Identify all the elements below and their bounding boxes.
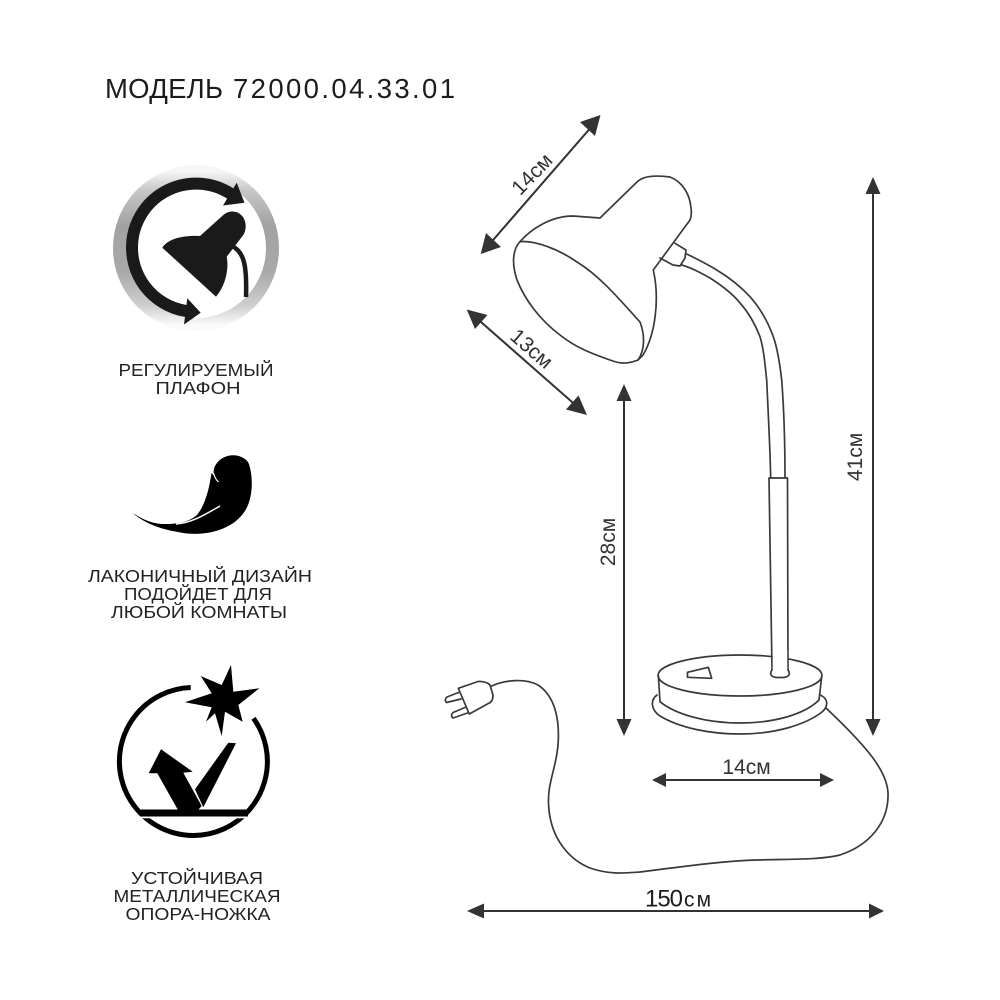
label: laconic design: ПОДОЙДЕТ ДЛЯ bbox=[124, 583, 272, 604]
base bbox=[652, 650, 827, 734]
icon: feather bbox=[132, 455, 252, 534]
label: laconic design: ЛАКОНИЧНЫЙ ДИЗАЙН bbox=[88, 565, 312, 586]
icon: stable metal base bbox=[119, 665, 267, 835]
power cord with plug bbox=[445, 681, 888, 873]
gooseneck arm bbox=[682, 254, 785, 478]
dimension: base width 14 cm: 14см bbox=[722, 756, 771, 779]
dimension: cord length 150 cm: см bbox=[684, 888, 711, 912]
lamp drawing bbox=[514, 176, 827, 734]
dimension: shade width 14 cm bbox=[481, 115, 600, 254]
dimension: shade depth 13 cm: 13см bbox=[505, 325, 557, 374]
label: adjustable shade: РЕГУЛИРУЕМЫЙ bbox=[118, 359, 274, 380]
label: laconic design: ЛЮБОЙ КОМНАТЫ bbox=[111, 601, 287, 622]
dimension: height 28 cm: 28см bbox=[597, 518, 620, 566]
dimension: height 41 cm bbox=[844, 177, 880, 736]
label: stable metal support: ОПОРА-НОЖКА bbox=[126, 904, 271, 924]
dimension: shade depth 13 cm bbox=[467, 310, 587, 415]
dimension: height 28 cm bbox=[597, 384, 632, 736]
title: 72000.04.33.01 bbox=[233, 73, 455, 104]
dimension: shade width 14 cm: 14см bbox=[507, 149, 557, 200]
lamp shade bbox=[514, 176, 691, 363]
dimension: cord length 150 cm: 150 bbox=[645, 886, 683, 912]
title: МОДЕЛЬ bbox=[105, 73, 223, 104]
sleeve bbox=[769, 478, 788, 670]
dimension: height 41 cm: 41см bbox=[844, 433, 867, 481]
label: stable metal support: МЕТАЛЛИЧЕСКАЯ bbox=[114, 886, 280, 906]
icon: adjustable lamp shade bbox=[120, 172, 272, 324]
collar bbox=[660, 243, 686, 266]
label: stable metal support: УСТОЙЧИВАЯ bbox=[131, 867, 263, 888]
dimension: cord length 150 cm bbox=[467, 886, 884, 918]
label: adjustable shade: ПЛАФОН bbox=[156, 378, 240, 398]
dimension: base width 14 cm bbox=[652, 756, 834, 787]
